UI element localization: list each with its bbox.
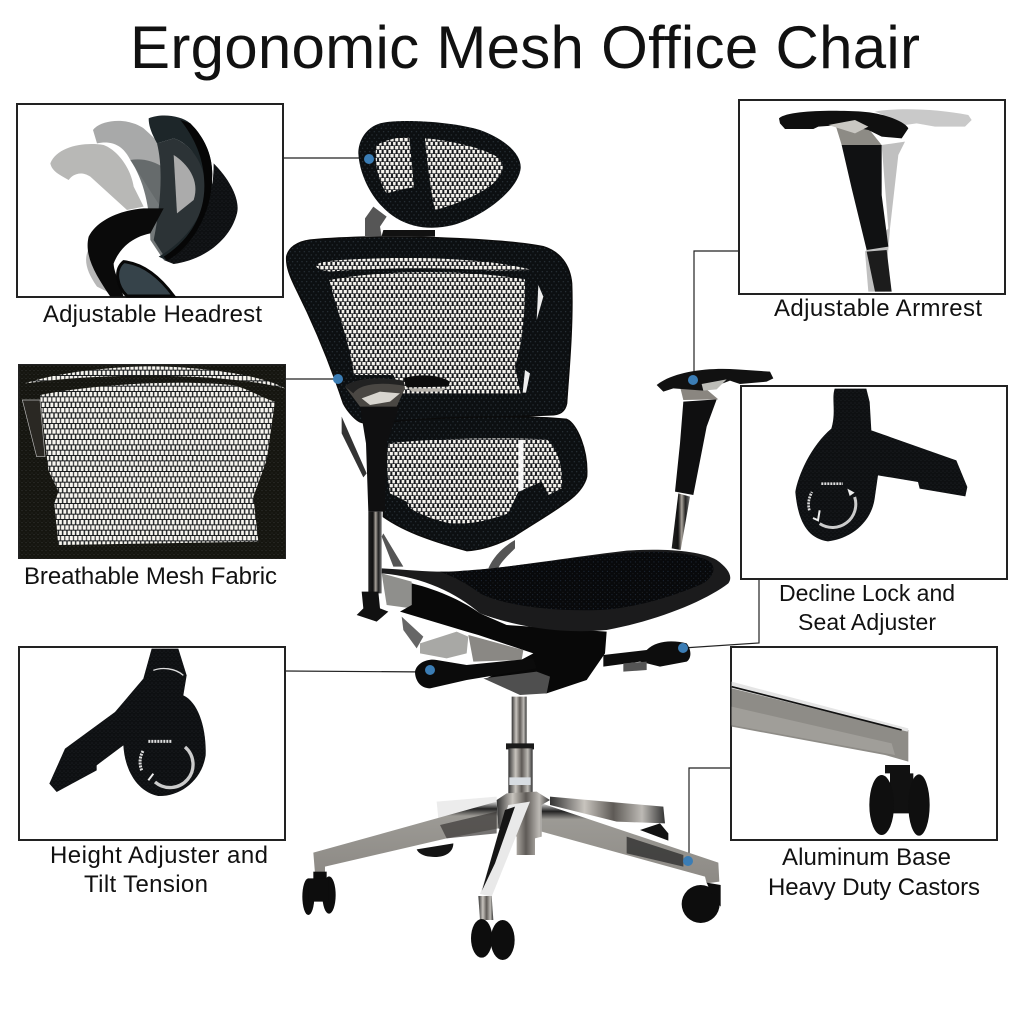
- label: height adjuster and tilt tension: Height Adjuster and: [50, 842, 268, 869]
- base leg and castor illustration: [732, 682, 930, 836]
- label: adjustable armrest: Adjustable Armrest: [774, 295, 982, 322]
- panel: adjustable headrest: [17, 104, 283, 297]
- headrest tilt illustration: [50, 116, 238, 297]
- label: aluminum base and castors: Heavy Duty Castors: [768, 874, 980, 901]
- label: breathable mesh fabric: Breathable Mesh Fabric: [24, 563, 277, 590]
- label: decline lock and seat adjuster: Decline Lock and: [779, 580, 955, 606]
- label: height adjuster and tilt tension: [50, 842, 268, 898]
- chair: lumbar support and frame: [342, 417, 587, 568]
- panel: decline lock and seat adjuster: [741, 386, 1007, 579]
- label: aluminum base and castors: Aluminum Base: [782, 844, 951, 871]
- chair: base: [302, 697, 721, 960]
- chair illustration: [287, 121, 773, 960]
- label: decline lock and seat adjuster: Seat Adjuster: [798, 609, 936, 635]
- panel: breathable mesh fabric: [19, 365, 285, 559]
- chair: backrest: [287, 237, 572, 423]
- leader lines connecting panels to chair: [283, 158, 759, 858]
- chair: right armrest: [657, 369, 773, 550]
- callout markers: blue dots: [333, 154, 698, 866]
- label: height adjuster and tilt tension: Tilt Tension: [84, 871, 208, 898]
- knob illustration: [795, 389, 967, 541]
- panel: height adjuster and tilt tension: [19, 647, 285, 840]
- label: decline lock and seat adjuster: [779, 580, 955, 635]
- chair: headrest: [358, 121, 521, 237]
- chair: seat and mechanism: [382, 550, 730, 695]
- knob illustration: [49, 649, 206, 796]
- label: aluminum base and castors: [768, 844, 980, 901]
- panel: aluminum base and castors: [731, 647, 997, 840]
- title: Ergonomic Mesh Office Chair: [130, 14, 920, 81]
- mesh close-up: [20, 365, 285, 559]
- armrest swivel illustration: [779, 109, 972, 292]
- panel: adjustable armrest: [739, 100, 1005, 294]
- label: adjustable headrest: Adjustable Headrest: [43, 301, 262, 328]
- chair: left armrest: [345, 375, 450, 622]
